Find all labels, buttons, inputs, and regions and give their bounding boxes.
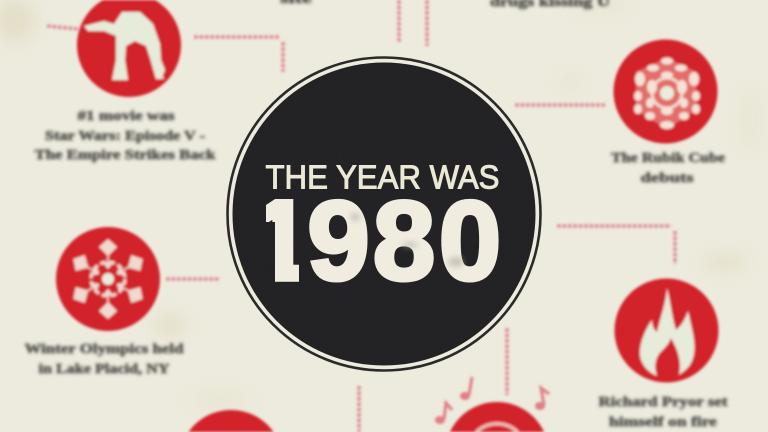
icon: AT-AT walker [77, 0, 181, 97]
heading: 1980: 8 [373, 178, 435, 304]
text: Winter Olympics caption: Winter Olympics held [24, 342, 184, 357]
heading: 1980 [266, 198, 499, 282]
text: Winter Olympics caption [24, 342, 184, 377]
heading: the year was: THE YEAR WAS [266, 160, 500, 196]
icon: music record with notes [435, 377, 549, 432]
text: top cropped captions [280, 0, 610, 10]
text: movie caption: The Empire Strikes Back [34, 148, 216, 163]
text: movie caption [34, 109, 216, 163]
badge disc [228, 58, 540, 370]
heading: 1980: 0 [439, 178, 501, 304]
text: Rubik Cube caption: debuts [640, 171, 694, 186]
text: movie caption: Star Wars: Episode V - [45, 129, 205, 144]
text: Winter Olympics caption: in Lake Placid, NY [38, 362, 170, 377]
icon: flame [614, 278, 718, 382]
text: Richard Pryor caption [598, 395, 728, 430]
text: movie caption: #1 movie was [78, 109, 175, 124]
heading: 1980: 1 [249, 178, 311, 303]
heading: 1980: 9 [307, 178, 370, 304]
icon: Rubik cube [614, 40, 718, 144]
text: Rubik Cube caption: The Rubik Cube [611, 151, 725, 166]
icon: bottom-left cropped circle [188, 410, 274, 432]
digit wear marks [350, 213, 464, 267]
central badge [228, 58, 540, 370]
icon: snowflake [56, 227, 160, 331]
text: Richard Pryor caption: Richard Pryor set [598, 395, 728, 410]
text: Rubik Cube caption [611, 151, 725, 186]
text: Richard Pryor caption: himself on fire [609, 415, 717, 430]
